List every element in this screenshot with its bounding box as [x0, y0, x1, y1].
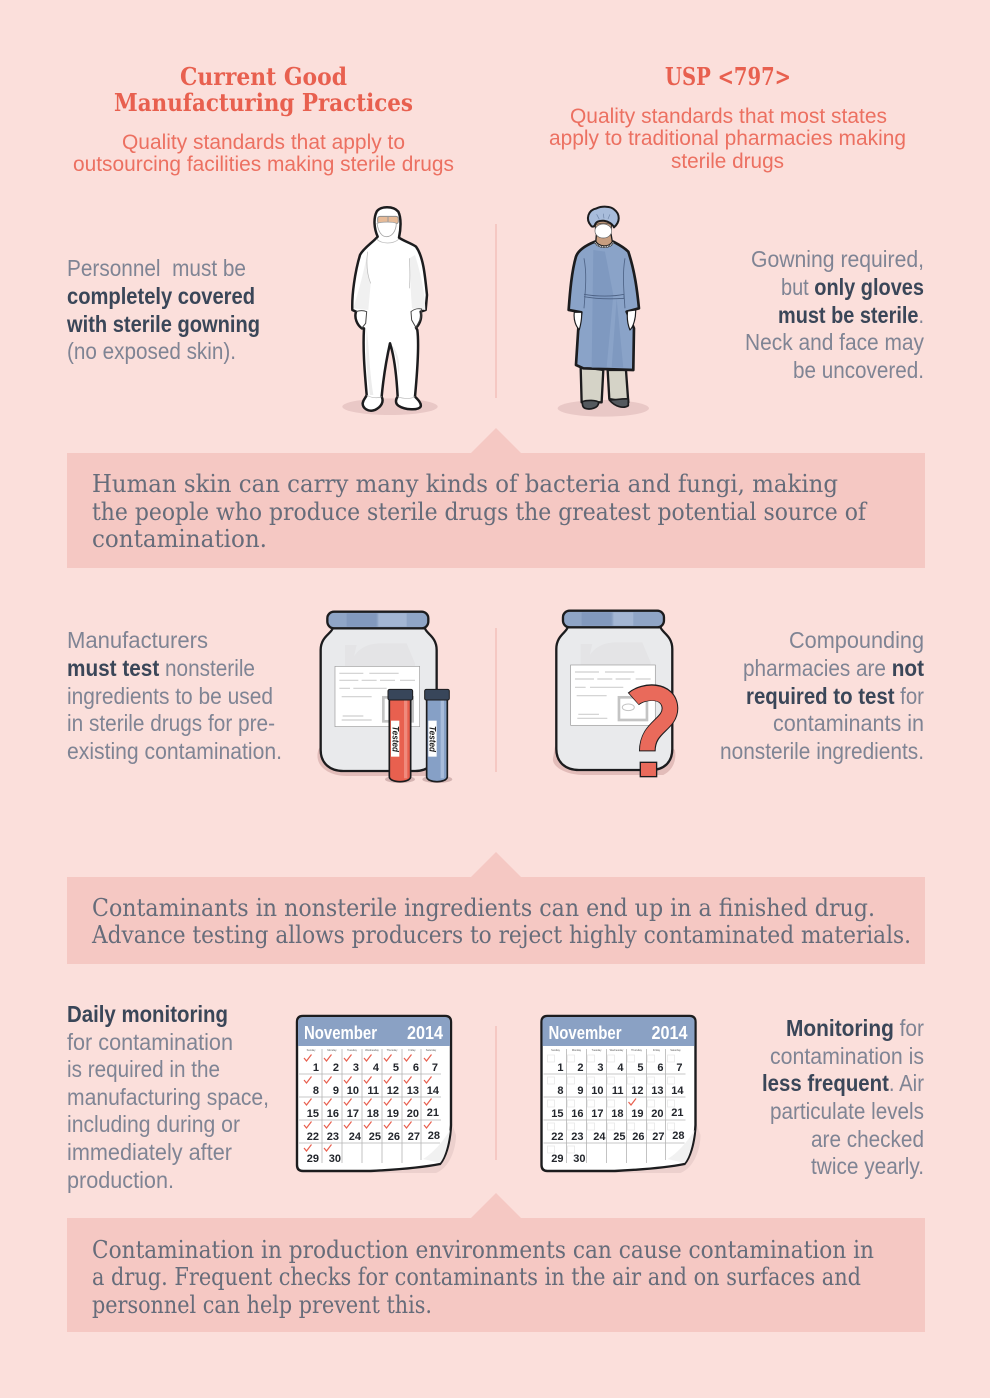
icon: calendar with single check: November — [548, 1023, 622, 1043]
icon: calendar with single check: 9 — [577, 1085, 584, 1097]
icon: calendar with daily checks: 12 — [387, 1085, 399, 1097]
subheading: outsourcing facility standards — [73, 131, 454, 176]
callout: production environments: Contamination in production environments can cause contamination in — [92, 1235, 874, 1264]
icon: calendar with daily checks: 10 — [347, 1085, 359, 1097]
callout: nonsterile ingredients — [67, 852, 925, 964]
divider — [495, 628, 497, 772]
icon: calendar with single check: Thursday — [631, 1048, 643, 1052]
icon: jar with question mark — [553, 611, 675, 777]
icon: calendar with daily checks: 4 — [373, 1062, 380, 1074]
heading: Current Good Manufacturing Practices: Current Good — [180, 62, 347, 91]
divider — [495, 224, 497, 398]
icon: calendar with single check: Monday — [572, 1048, 582, 1052]
text block: pharmacies not required to test — [720, 627, 924, 764]
icon: calendar with daily checks: 22 — [307, 1131, 319, 1143]
icon: calendar with single check: Wednesday — [610, 1048, 624, 1052]
icon: calendar with single check: 4 — [617, 1062, 624, 1074]
subheading: traditional pharmacy standards: Quality standards that most states — [570, 105, 887, 128]
icon: calendar with daily checks: Tuesday — [347, 1048, 358, 1052]
text block: less frequent monitoring: particulate levels — [770, 1098, 924, 1124]
text block: gowning at pharmacies: must be sterile. — [778, 302, 924, 328]
icon: calendar with single check: 21 — [671, 1107, 684, 1119]
icon: calendar with daily checks: 6 — [413, 1062, 419, 1074]
subheading: traditional pharmacy standards: apply to traditional pharmacies making — [549, 127, 906, 150]
icon: calendar with daily checks: 1 — [313, 1062, 319, 1074]
icon: calendar with single check: 2014 — [652, 1023, 688, 1043]
icon: calendar with daily checks: 23 — [327, 1131, 339, 1143]
text block: gowning at pharmacies: be uncovered. — [793, 357, 924, 383]
icon: calendar with single check: 23 — [571, 1131, 584, 1143]
divider — [495, 1026, 497, 1160]
text block: manufacturers must test — [67, 627, 282, 764]
text block: daily monitoring: Daily monitoring — [67, 1001, 228, 1027]
text block: daily monitoring: including during or — [67, 1111, 240, 1137]
icon: calendar with daily checks: 25 — [369, 1131, 381, 1143]
callout: production environments — [67, 1193, 925, 1332]
icon: calendar with single check: 8 — [557, 1085, 564, 1097]
icon: calendar with daily checks: 8 — [313, 1085, 319, 1097]
icon: calendar with single check: 14 — [671, 1085, 684, 1097]
text block: less frequent monitoring — [762, 1015, 924, 1179]
icon: calendar with single check: 18 — [611, 1108, 624, 1120]
icon: calendar with daily checks: 29 — [307, 1153, 319, 1165]
icon: calendar with single check: 22 — [551, 1131, 564, 1143]
text block: manufacturers must test: Manufacturers — [67, 627, 208, 653]
callout: production environments: personnel can help prevent this. — [92, 1290, 432, 1319]
icon: calendar with daily checks: 28 — [428, 1130, 440, 1142]
text block: personnel gowning, manufacturers: completely covered — [67, 283, 255, 309]
text block: manufacturers must test: ingredients to be used — [67, 683, 273, 709]
icon: calendar with daily checks: 30 — [329, 1153, 341, 1165]
text block: gowning at pharmacies: but only gloves — [781, 274, 924, 300]
icon: calendar with daily checks: Saturday — [426, 1048, 437, 1052]
icon: calendar with daily checks: 27 — [408, 1131, 420, 1143]
icon: calendar with single check: 5 — [637, 1062, 644, 1074]
icon: calendar with daily checks: 9 — [333, 1085, 339, 1097]
icon: calendar with single check: 17 — [591, 1108, 604, 1120]
text block: manufacturers must test: in sterile drugs for pre- — [67, 710, 275, 736]
icon: calendar with daily checks: 13 — [407, 1085, 419, 1097]
text block: manufacturers must test: existing contamination. — [67, 738, 282, 764]
icon: calendar with single check — [542, 1016, 700, 1173]
icon: person in gown, cap and mask — [558, 207, 649, 417]
icon: calendar with daily checks: 16 — [327, 1108, 339, 1120]
subheading: traditional pharmacy standards: sterile drugs — [671, 150, 784, 173]
icon: calendar with single check: 10 — [591, 1085, 604, 1097]
icon: calendar with single check: 1 — [557, 1062, 564, 1074]
icon: calendar with single check: Tuesday — [592, 1048, 602, 1052]
icon: calendar with single check: 12 — [631, 1085, 644, 1097]
icon: calendar with single check: 6 — [657, 1062, 664, 1074]
heading: Current Good Manufacturing Practices — [114, 62, 413, 117]
icon: calendar with daily checks: Wednesday — [365, 1048, 380, 1052]
icon: calendar with daily checks: Monday — [327, 1048, 337, 1052]
callout: human skin: contamination. — [92, 524, 267, 553]
icon: calendar with daily checks: 2014 — [407, 1023, 443, 1043]
icon: jar with tested vials: Tested — [428, 726, 438, 752]
text block: daily monitoring: for contamination — [67, 1029, 233, 1055]
text block: daily monitoring: production. — [67, 1167, 174, 1193]
text block: gowning at pharmacies — [745, 246, 924, 383]
icon: calendar with daily checks — [297, 1016, 456, 1173]
text block: less frequent monitoring: twice yearly. — [811, 1153, 924, 1179]
text block: pharmacies not required to test: contaminants in — [773, 710, 924, 736]
icon: calendar with single check: 28 — [672, 1130, 684, 1142]
text block: pharmacies not required to test: required to test for — [746, 683, 924, 709]
icon: calendar with daily checks: 19 — [387, 1108, 399, 1120]
icon: calendar with single check: 7 — [676, 1062, 682, 1074]
icon: calendar with daily checks: 14 — [427, 1085, 440, 1097]
icon: calendar with daily checks: 5 — [393, 1062, 399, 1074]
icon: calendar with single check: 27 — [652, 1131, 664, 1143]
icon: calendar with daily checks: Friday — [408, 1048, 416, 1052]
icon: calendar with single check: 30 — [573, 1153, 586, 1165]
icon: calendar with single check: 19 — [631, 1108, 644, 1120]
icon: jar with tested vials — [317, 612, 452, 783]
icon: calendar with single check: Friday — [653, 1048, 661, 1052]
text block: personnel gowning, manufacturers — [66, 255, 260, 364]
icon: calendar with daily checks: 21 — [427, 1107, 439, 1119]
icon: calendar with single check: 16 — [571, 1108, 584, 1120]
icon: calendar with daily checks: November — [304, 1023, 377, 1043]
text block: pharmacies not required to test: nonsterile ingredients. — [720, 738, 924, 764]
text block: personnel gowning, manufacturers: with sterile gowning — [66, 311, 260, 337]
text block: less frequent monitoring: Monitoring for — [786, 1015, 924, 1041]
text block: less frequent monitoring: contamination is — [770, 1043, 924, 1069]
text block: daily monitoring: immediately after — [67, 1139, 232, 1165]
text block: personnel gowning, manufacturers: Personnel must be — [67, 255, 246, 281]
callout: human skin: the people who produce sterile drugs the greatest potential source of — [92, 497, 868, 526]
icon: calendar with daily checks: 3 — [353, 1062, 359, 1074]
icon: calendar with daily checks: 26 — [388, 1131, 400, 1143]
text block: gowning at pharmacies: Neck and face may — [745, 329, 924, 355]
icon: calendar with single check: Sunday — [551, 1048, 561, 1052]
heading: USP 797: USP <797> — [665, 62, 791, 91]
icon: calendar with daily checks: 15 — [307, 1108, 319, 1120]
icon: calendar with daily checks: 17 — [347, 1108, 359, 1120]
icon: calendar with daily checks: 24 — [349, 1131, 362, 1143]
callout: production environments: a drug. Frequent checks for contaminants in the air and on surfaces and — [92, 1262, 861, 1291]
text block: manufacturers must test: must test nonsterile — [67, 655, 255, 681]
text block: gowning at pharmacies: Gowning required, — [751, 246, 924, 272]
icon: calendar with daily checks: 7 — [432, 1062, 438, 1074]
text block: pharmacies not required to test: pharmacies are not — [743, 655, 924, 681]
icon: calendar with single check: 11 — [612, 1085, 624, 1097]
icon: calendar with single check: 15 — [551, 1108, 564, 1120]
callout: human skin: Human skin can carry many kinds of bacteria and fungi, making — [92, 469, 838, 498]
icon: calendar with single check: 2 — [577, 1062, 584, 1074]
icon: jar with tested vials: Tested — [390, 726, 400, 752]
text block: daily monitoring — [67, 1001, 269, 1193]
icon: calendar with daily checks: 18 — [367, 1108, 379, 1120]
icon: calendar with single check: 25 — [613, 1131, 626, 1143]
icon: calendar with single check: 29 — [551, 1153, 564, 1165]
text block: pharmacies not required to test: Compounding — [789, 627, 924, 653]
icon: calendar with daily checks: 20 — [407, 1108, 419, 1120]
subheading: outsourcing facility standards: outsourcing facilities making sterile drugs — [73, 153, 454, 176]
icon: calendar with daily checks: 2 — [333, 1062, 339, 1074]
icon: calendar with single check: 24 — [593, 1131, 606, 1143]
text block: daily monitoring: is required in the — [67, 1056, 220, 1082]
subheading: outsourcing facility standards: Quality standards that apply to — [122, 131, 405, 154]
text block: less frequent monitoring: less frequent. Air — [762, 1070, 924, 1096]
icon: calendar with daily checks: Sunday — [307, 1048, 316, 1052]
icon: calendar with daily checks: Thursday — [387, 1048, 398, 1052]
text block: less frequent monitoring: are checked — [811, 1126, 924, 1152]
icon: calendar with single check: 20 — [651, 1108, 664, 1120]
icon: calendar with single check: 13 — [651, 1085, 664, 1097]
icon: person in full sterile coverall — [342, 207, 438, 415]
callout: human skin — [67, 428, 925, 568]
text block: personnel gowning, manufacturers: (no exposed skin). — [67, 338, 236, 364]
subheading: traditional pharmacy standards — [549, 105, 906, 173]
icon: calendar with daily checks: 11 — [367, 1085, 379, 1097]
icon: calendar with single check: Saturday — [670, 1048, 681, 1052]
callout: nonsterile ingredients: Contaminants in nonsterile ingredients can end up in a finished drug. — [92, 893, 875, 922]
icon: calendar with single check: 3 — [597, 1062, 604, 1074]
text block: daily monitoring: manufacturing space, — [67, 1084, 269, 1110]
heading: Current Good Manufacturing Practices: Manufacturing Practices — [114, 88, 413, 117]
icon: calendar with single check: 26 — [632, 1131, 644, 1143]
